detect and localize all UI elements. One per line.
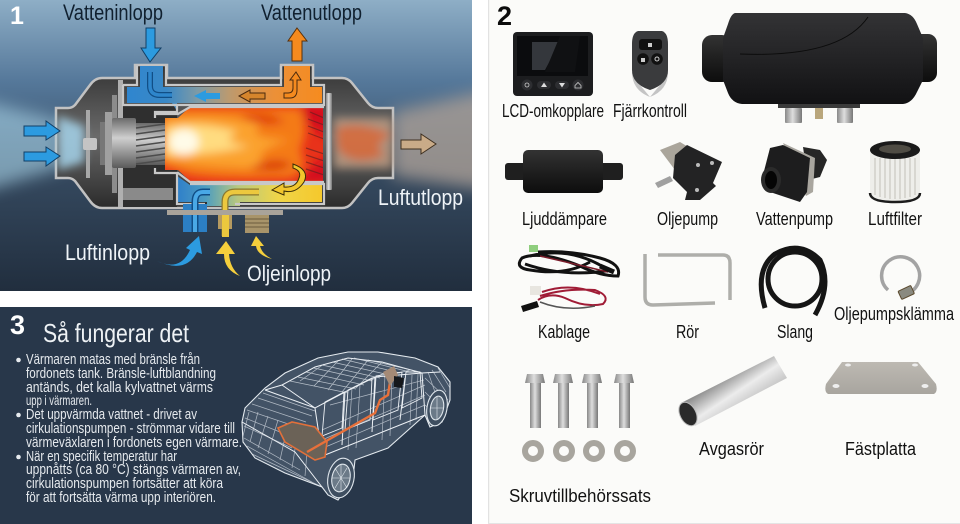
return flow arrow bbox=[272, 164, 306, 195]
air in arrow upper bbox=[24, 121, 60, 140]
product: hose bbox=[761, 248, 825, 315]
label: Vatteninlopp: Vatteninlopp bbox=[63, 0, 163, 25]
rear component bbox=[383, 366, 404, 388]
air inlet curved arrow bbox=[157, 236, 202, 266]
label: Fästplatta: Fästplatta bbox=[845, 438, 917, 459]
fuel nozzle bbox=[218, 215, 232, 229]
bullet list: cirkulationspumpen fortsätter att köra bbox=[26, 476, 224, 492]
lower channel bbox=[177, 173, 324, 206]
air inlet pipe bbox=[183, 192, 210, 232]
coolant pipe bbox=[307, 370, 393, 452]
product: exhaust pipe bbox=[675, 356, 787, 429]
mounting base plate bbox=[167, 210, 283, 215]
product: air filter bbox=[870, 141, 920, 202]
bullet list: När en specifik temperatur har bbox=[26, 449, 177, 465]
product: mounting plate bbox=[825, 362, 937, 394]
heater module in car bbox=[278, 422, 327, 460]
label: Avgasrör: Avgasrör bbox=[699, 438, 764, 459]
ribbed shaft bbox=[136, 123, 165, 165]
lower rod bbox=[123, 188, 173, 200]
product: oil pump bbox=[655, 142, 722, 200]
back plate bbox=[112, 95, 117, 193]
bullet list bbox=[16, 352, 242, 506]
bullet list: upp i värmaren. bbox=[26, 393, 92, 408]
front wheel bbox=[324, 456, 358, 500]
fan bbox=[83, 110, 112, 178]
rear wheel bbox=[424, 389, 450, 427]
chamber liner bbox=[155, 107, 324, 182]
label: Ljuddämpare: Ljuddämpare bbox=[522, 208, 607, 229]
label: Fjärrkontroll: Fjärrkontroll bbox=[613, 100, 687, 121]
upper water channel bbox=[123, 66, 324, 118]
label: Vattenpump: Vattenpump bbox=[756, 208, 833, 229]
bullet list: Värmaren matas med bränsle från bbox=[26, 352, 200, 368]
combustion chamber flame bbox=[165, 108, 323, 181]
brass fitting bbox=[245, 215, 269, 233]
inner compartment bbox=[123, 104, 177, 207]
label: Rör: Rör bbox=[676, 321, 699, 342]
water outlet arrow bbox=[288, 28, 307, 61]
fuel line bbox=[225, 192, 259, 236]
product: silencer bbox=[505, 150, 623, 193]
product: bolts and washers bbox=[525, 374, 634, 459]
heading: Så fungerar det bbox=[43, 318, 190, 348]
structural lines bbox=[242, 358, 440, 487]
roof mesh bbox=[290, 358, 420, 393]
label: Luftfilter: Luftfilter bbox=[868, 208, 922, 229]
label: Vattenutlopp: Vattenutlopp bbox=[261, 0, 362, 25]
hood mesh bbox=[243, 393, 320, 486]
panel 2: kit contents bbox=[488, 0, 960, 524]
label: Oljepump: Oljepump bbox=[657, 208, 718, 229]
bolts bbox=[525, 374, 634, 428]
label: Skruvtillbehörssats: Skruvtillbehörssats bbox=[509, 485, 651, 506]
bullet list: antänds, det kalla kylvattnet värms bbox=[26, 380, 213, 396]
fan air glow bbox=[58, 116, 84, 170]
fuel curved arrow bbox=[216, 241, 240, 276]
water inlet arrow bbox=[141, 28, 161, 62]
bullet list: cirkulationspumpen - strömmar vidare till bbox=[26, 421, 235, 437]
label: Luftutlopp: Luftutlopp bbox=[378, 185, 463, 210]
rear chamber plate bbox=[326, 93, 332, 190]
bullet list: värmeväxlaren i fordonets egen värmare. bbox=[26, 435, 242, 451]
windows bbox=[322, 372, 422, 436]
product: water pump bbox=[761, 143, 827, 202]
bullet list: fordonets tank. Bränsle-luftblandning bbox=[26, 366, 216, 382]
product: diesel heater bbox=[702, 13, 937, 123]
motor cylinder bbox=[112, 118, 136, 168]
label: Oljeinlopp: Oljeinlopp bbox=[247, 261, 331, 286]
exhaust wisps inside housing bbox=[334, 118, 392, 168]
exhaust plume bbox=[392, 90, 490, 190]
label: Luftinlopp: Luftinlopp bbox=[65, 240, 150, 265]
product: remote control bbox=[632, 31, 668, 97]
bullet list: Det uppvärmda vattnet - drivet av bbox=[26, 407, 198, 423]
label: Slang: Slang bbox=[777, 321, 813, 342]
section number 2: 2 bbox=[497, 1, 512, 31]
product: hose clamp bbox=[882, 257, 920, 299]
label: Kablage: Kablage bbox=[538, 321, 590, 342]
panel 3: how it works bbox=[0, 307, 472, 524]
bullet list: uppnåtts (ca 80 °C) stängs värmaren av, bbox=[26, 462, 241, 478]
inner wall bbox=[118, 80, 123, 207]
water flow arrows bbox=[150, 72, 301, 102]
bullet list: för att fortsätta värma upp interiören. bbox=[26, 490, 216, 506]
heater housing bbox=[56, 65, 393, 208]
section number 1: 1 bbox=[10, 2, 24, 30]
washers bbox=[525, 443, 633, 459]
label: LCD-omkopplare: LCD-omkopplare bbox=[502, 100, 604, 121]
wireframe car bbox=[242, 352, 450, 500]
air intake glow bbox=[0, 100, 60, 192]
product: wiring harness bbox=[519, 245, 619, 312]
oil curved arrow bbox=[251, 236, 272, 259]
fuel nozzle tip bbox=[222, 215, 229, 237]
side mesh bbox=[322, 368, 450, 450]
car body shell bbox=[242, 352, 450, 500]
section number 3: 3 bbox=[10, 310, 25, 340]
panel 1: heater cross-section bbox=[0, 0, 490, 291]
air in arrow lower bbox=[24, 147, 60, 166]
product: LCD switch bbox=[513, 32, 593, 96]
exhaust arrow bbox=[401, 134, 436, 154]
product: pipes bbox=[645, 254, 730, 305]
